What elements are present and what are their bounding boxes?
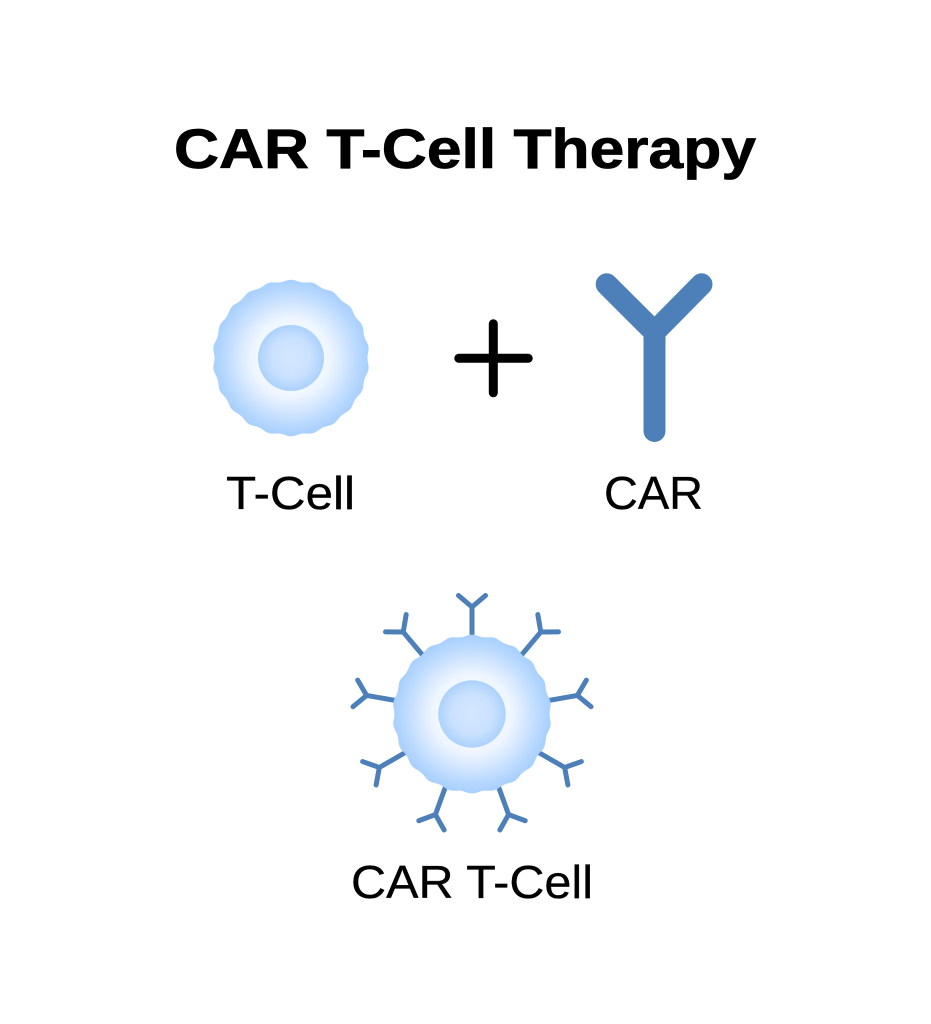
title: CAR T-Cell Therapy [174, 117, 756, 180]
icon: CAR T-cell [353, 596, 591, 830]
label: CAR: CAR [604, 467, 703, 519]
icon: plus sign [459, 324, 528, 393]
icon: T-cell [212, 280, 370, 436]
receptors around cell [353, 596, 591, 830]
icon: CAR receptor [607, 284, 702, 431]
label: CAR T-Cell: CAR T-Cell [351, 856, 593, 908]
label: T-Cell: T-Cell [226, 467, 355, 519]
